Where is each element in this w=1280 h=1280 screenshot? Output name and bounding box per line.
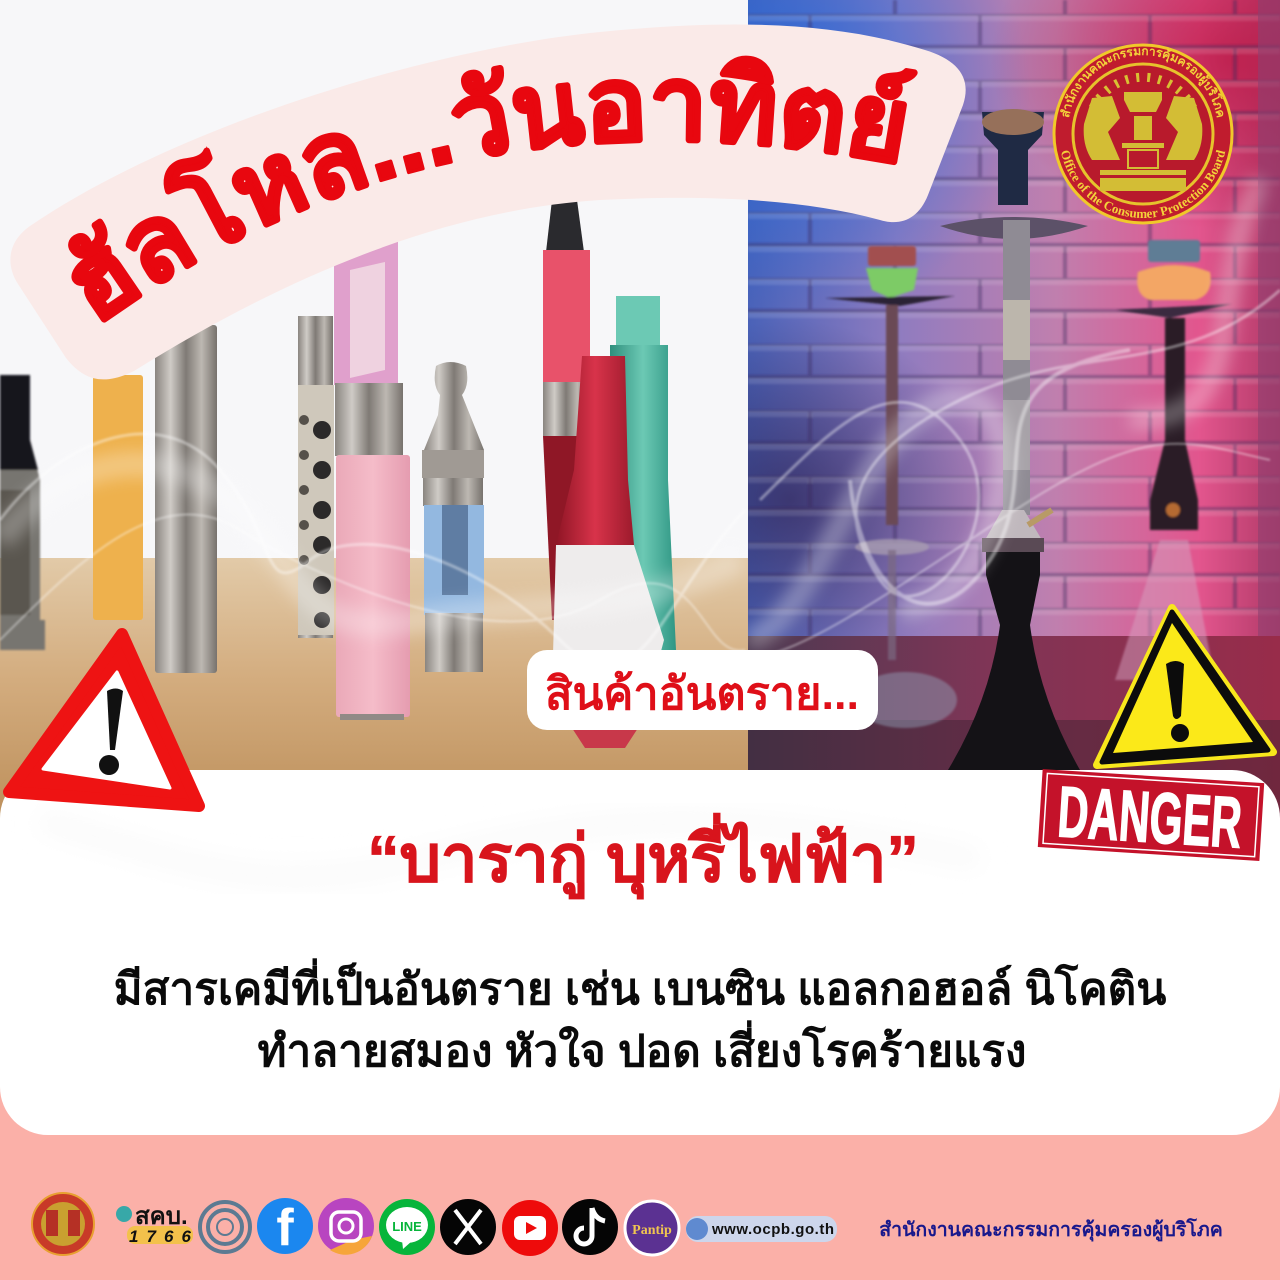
line 2: ทำลายสมอง หัวใจ ปอด เสี่ยงโรคร้ายแรง bbox=[258, 1020, 1026, 1076]
white content panel bbox=[0, 770, 1280, 1135]
footer logo strip bbox=[32, 1193, 837, 1257]
footer seal bbox=[32, 1193, 94, 1255]
footer organization name: สำนักงานคณะกรรมการคุ้มครองผู้บริโภค bbox=[879, 1218, 1223, 1243]
hookah: right bbox=[1115, 240, 1232, 680]
device: green pen bbox=[610, 296, 676, 650]
device: yellow tube bbox=[93, 375, 143, 620]
caption text: สินค้าอันตราย... bbox=[545, 668, 859, 719]
smoke lines over left photo bbox=[0, 434, 745, 666]
photo: hookahs on neon brick wall bbox=[748, 0, 1280, 818]
device: skull battery bbox=[298, 316, 334, 638]
facebook bbox=[257, 1198, 313, 1257]
red warning triangle bbox=[9, 634, 199, 806]
caption pill bbox=[527, 650, 878, 730]
pantip: Pantip bbox=[632, 1223, 672, 1238]
device: steel tube bbox=[155, 325, 217, 673]
soft wash over devices bbox=[0, 464, 740, 624]
heading: “บารากู่ บุหรี่ไฟฟ้า” bbox=[367, 813, 919, 900]
device: blue tank bbox=[422, 362, 484, 672]
device: pink pen bbox=[334, 240, 410, 720]
seal logo top right bbox=[1052, 44, 1234, 224]
website bbox=[686, 1216, 837, 1242]
hookah: center bbox=[940, 109, 1088, 790]
seal emblem bbox=[1084, 92, 1202, 191]
photo: e-cigarettes on wooden table bbox=[0, 0, 748, 830]
title text: ฮัลโหล...วันอาทิตย์ bbox=[68, 56, 918, 323]
seal rays bbox=[1093, 77, 1193, 108]
line bbox=[379, 1199, 435, 1255]
hookah: left bbox=[825, 246, 957, 728]
device: red bottle bbox=[553, 356, 664, 748]
seal ring text: สำนักงานคณะกรรมการคุ้มครองผู้บริโภค bbox=[1060, 48, 1224, 118]
body text bbox=[114, 958, 1166, 1076]
website: www.ocpb.go.th bbox=[711, 1221, 834, 1238]
title pill bbox=[10, 25, 966, 379]
seal logo top right: Office of the Consumer Protection Board bbox=[1062, 150, 1226, 218]
instagram bbox=[318, 1198, 374, 1255]
exclamation mark bbox=[107, 688, 123, 750]
hotline 1766: 1766 bbox=[129, 1227, 192, 1246]
soft smoke bands bbox=[748, 180, 1260, 640]
yellow warning triangle bbox=[1097, 608, 1273, 765]
youtube bbox=[502, 1200, 558, 1256]
CPB mark bbox=[200, 1202, 250, 1252]
line: LINE bbox=[392, 1219, 422, 1234]
line 1: มีสารเคมีที่เป็นอันตราย เช่น เบนซิน แอลกอฮอล์ นิโคติน bbox=[114, 958, 1166, 1014]
pantip bbox=[625, 1201, 679, 1255]
facebook: f bbox=[276, 1199, 294, 1257]
hotline 1766: สคบ. bbox=[135, 1203, 188, 1230]
tiktok bbox=[562, 1199, 618, 1255]
x bbox=[440, 1199, 496, 1255]
faint smoke on panel bbox=[40, 820, 980, 877]
device: black tank bbox=[0, 375, 45, 650]
device: red pen bbox=[543, 200, 590, 620]
exclamation mark bbox=[1166, 661, 1184, 719]
hotline 1766 bbox=[116, 1203, 193, 1246]
smoke bbox=[748, 290, 1280, 660]
